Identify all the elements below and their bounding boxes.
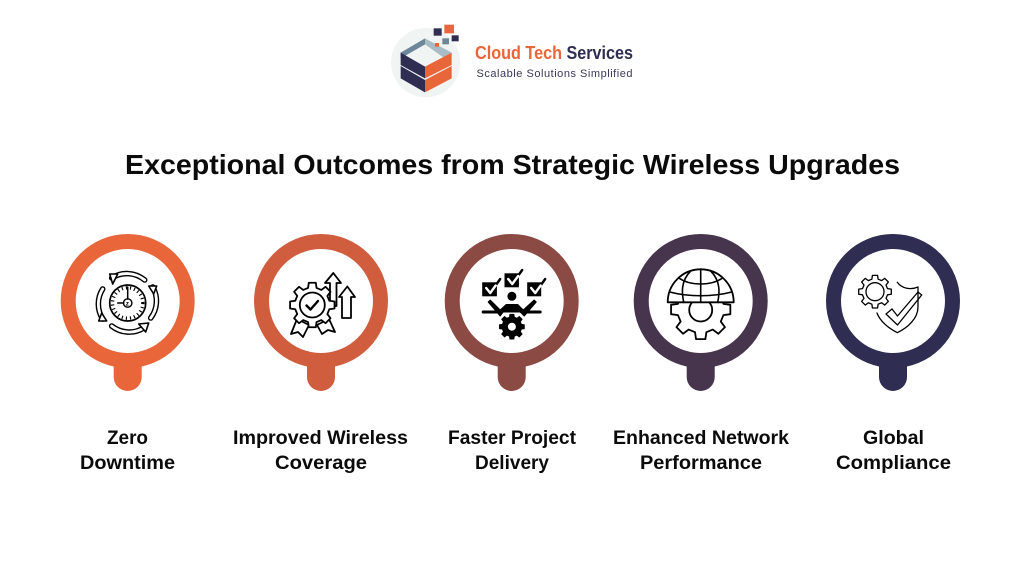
logo name: Cloud Tech <box>475 43 562 63</box>
panel: zero downtime <box>61 234 195 391</box>
panel: faster project delivery <box>445 234 579 391</box>
logo tagline: Scalable Solutions Simplified <box>476 68 632 80</box>
icon: globe over gear <box>668 269 734 339</box>
label: faster project delivery: Delivery <box>475 452 549 474</box>
label: zero downtime: Zero <box>107 427 148 449</box>
panel: improved wireless coverage <box>254 234 388 391</box>
label: enhanced network performance <box>613 427 789 474</box>
icon: clock with cycle arrows <box>98 274 157 332</box>
label: zero downtime <box>80 427 175 474</box>
label: zero downtime: Downtime <box>80 452 175 474</box>
label: global compliance <box>836 427 951 474</box>
panel: global compliance <box>826 234 960 391</box>
title: Exceptional Outcomes from Strategic Wireless Upgrades <box>125 149 900 180</box>
logo: Cloud Tech Services <box>391 25 633 97</box>
label: improved wireless coverage: Coverage <box>275 452 367 474</box>
label: global compliance: Global <box>863 427 924 449</box>
label: improved wireless coverage: Improved Wireless <box>233 427 408 449</box>
marker ring <box>61 234 195 391</box>
label: global compliance: Compliance <box>836 452 951 474</box>
marker ring <box>826 234 960 391</box>
label: enhanced network performance: Enhanced Network <box>613 427 789 449</box>
icon: gear and shield check <box>859 275 922 333</box>
panel: enhanced network performance <box>634 234 768 391</box>
marker ring <box>254 234 388 391</box>
label: faster project delivery: Faster Project <box>448 427 576 449</box>
icon: person with checklists and gear <box>482 270 545 339</box>
icon: award gear with up arrows <box>290 273 355 337</box>
marker ring <box>634 234 768 391</box>
logo name: Services <box>566 43 633 63</box>
icon: clock with cycle arrows: z <box>126 300 130 308</box>
label: improved wireless coverage <box>233 427 408 474</box>
logo mark <box>391 25 460 97</box>
marker ring <box>445 234 579 391</box>
label: enhanced network performance: Performance <box>640 452 762 474</box>
label: faster project delivery <box>448 427 576 474</box>
